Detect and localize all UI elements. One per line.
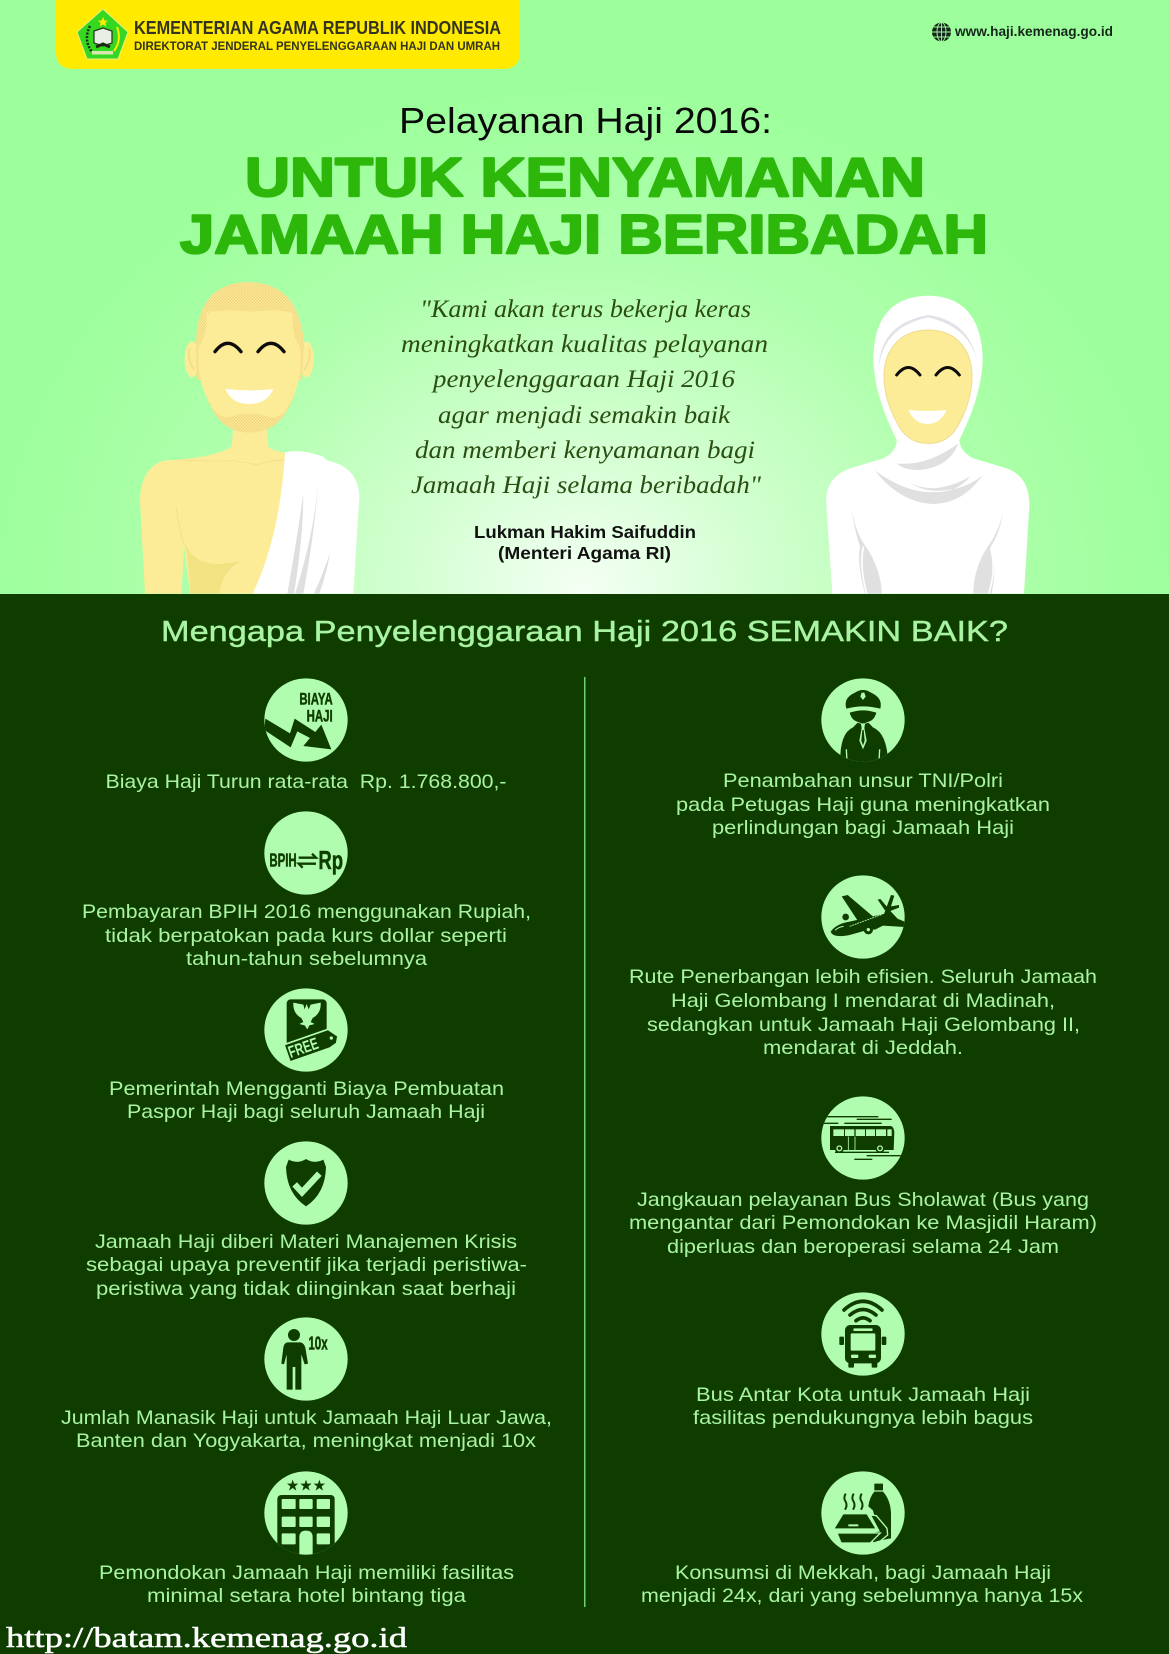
icon: sholawat bus xyxy=(821,1096,905,1180)
quote: dan memberi kenyamanan bagi xyxy=(415,437,755,464)
text: manasik: Banten dan Yogyakarta, meningkat menjadi 10x xyxy=(76,1430,536,1452)
text: paspor xyxy=(109,1078,504,1123)
text: directorate name: DIREKTORAT JENDERAL PENYELENGGARAAN HAJI DAN UMRAH xyxy=(134,41,500,53)
text: biaya haji: Biaya Haji Turun rata-rata Rp. 1.768.800,- xyxy=(106,771,506,793)
quote attribution: (Menteri Agama RI) xyxy=(498,543,671,563)
text: pemondokan: Pemondokan Jamaah Haji memiliki fasilitas xyxy=(99,1562,514,1584)
website link xyxy=(932,22,1113,42)
text: bus antar kota: fasilitas pendukungnya lebih bagus xyxy=(693,1407,1033,1429)
text: website: www.haji.kemenag.go.id xyxy=(954,24,1113,39)
title: subtitle line: Pelayanan Haji 2016: xyxy=(399,100,772,141)
text: TNI/Polri: Penambahan unsur TNI/Polri xyxy=(723,770,1003,792)
quote xyxy=(401,296,768,499)
quote: meningkatkan kualitas pelayanan xyxy=(401,331,768,358)
hair xyxy=(196,282,304,380)
text: pemondokan xyxy=(99,1562,514,1607)
icon: shield check xyxy=(264,1141,348,1225)
text: paspor: Pemerintah Mengganti Biaya Pembuatan xyxy=(109,1078,504,1100)
icon: wifi bus xyxy=(821,1292,905,1376)
icon: police officer xyxy=(821,678,905,762)
text: manajemen krisis xyxy=(86,1231,527,1300)
eyes xyxy=(215,343,284,352)
icon: BPIH to Rupiah: BPIH xyxy=(269,849,297,870)
beard xyxy=(204,390,296,433)
quote: agar menjadi semakin baik xyxy=(438,402,731,429)
text: rute penerbangan: Haji Gelombang I mendarat di Madinah, xyxy=(671,990,1055,1012)
icon: biaya haji falling arrow: HAJI xyxy=(307,706,333,725)
background: dark green lower panel xyxy=(0,594,1169,1654)
icon: biaya haji falling arrow: BIAYA xyxy=(299,690,333,709)
text: TNI/Polri: perlindungan bagi Jamaah Haji xyxy=(712,817,1014,839)
text: BPIH: tidak berpatokan pada kurs dollar seperti xyxy=(105,925,507,947)
quote attribution: Lukman Hakim Saifuddin xyxy=(474,522,696,542)
icon: BPIH to Rupiah xyxy=(264,811,348,895)
quote: penyelenggaraan Haji 2016 xyxy=(431,366,736,393)
body xyxy=(140,427,287,594)
face xyxy=(198,310,301,433)
white cloth xyxy=(253,451,359,594)
text: bus sholawat: diperluas dan beroperasi selama 24 Jam xyxy=(667,1236,1059,1258)
text: BPIH: Pembayaran BPIH 2016 menggunakan Rupiah, xyxy=(82,901,531,923)
text: bus sholawat xyxy=(629,1189,1097,1258)
smile xyxy=(225,389,273,404)
text: bus antar kota: Bus Antar Kota untuk Jamaah Haji xyxy=(696,1384,1030,1406)
text: manasik: Jumlah Manasik Haji untuk Jamaah Haji Luar Jawa, xyxy=(61,1407,552,1429)
text: bus sholawat: mengantar dari Pemondokan ke Masjidil Haram) xyxy=(629,1212,1097,1234)
quote attribution xyxy=(474,522,696,563)
text: konsumsi: Konsumsi di Mekkah, bagi Jamaah Haji xyxy=(675,1562,1051,1584)
header badge xyxy=(56,0,520,69)
background: light green radial xyxy=(0,0,1169,594)
folds xyxy=(875,443,983,504)
text: TNI/Polri: pada Petugas Haji guna meningkatkan xyxy=(676,794,1050,816)
icon: passport free: FREE xyxy=(286,1034,321,1062)
icon: airplane xyxy=(821,875,905,959)
ears xyxy=(185,341,199,377)
text: rute penerbangan: Rute Penerbangan lebih efisien. Seluruh Jamaah xyxy=(629,966,1097,988)
icon: ministry logo xyxy=(77,9,128,59)
eyes xyxy=(897,367,959,375)
text: konsumsi xyxy=(641,1562,1083,1607)
icon: person 10x: 10x xyxy=(308,1333,328,1354)
text: bus sholawat: Jangkauan pelayanan Bus Sholawat (Bus yang xyxy=(637,1189,1089,1211)
text: paspor: Paspor Haji bagi seluruh Jamaah Haji xyxy=(127,1101,485,1123)
icon: biaya haji falling arrow xyxy=(264,678,348,762)
text: konsumsi: menjadi 24x, dari yang sebelumnya hanya 15x xyxy=(641,1585,1083,1607)
text: manasik xyxy=(61,1407,552,1452)
icon: passport free xyxy=(264,988,348,1072)
title: main heading: JAMAAH HAJI BERIBADAH xyxy=(180,203,988,265)
icon: BPIH to Rupiah: Rp xyxy=(318,845,343,875)
quote: Jamaah Haji selama beribadah" xyxy=(411,472,762,499)
text: pemondokan: minimal setara hotel bintang tiga xyxy=(147,1585,466,1607)
icon: hotel three stars xyxy=(264,1471,348,1562)
text: TNI/Polri xyxy=(676,770,1050,839)
icon: food box and bottle xyxy=(821,1471,905,1555)
section heading: Mengapa Penyelenggaraan Haji 2016 SEMAKIN BAIK? xyxy=(161,616,1008,648)
text: bus antar kota xyxy=(693,1384,1033,1429)
text: manajemen krisis: Jamaah Haji diberi Materi Manajemen Krisis xyxy=(95,1231,517,1253)
face xyxy=(884,330,972,443)
smile xyxy=(908,410,947,424)
quote: "Kami akan terus bekerja keras xyxy=(420,296,751,323)
text: rute penerbangan xyxy=(629,966,1097,1059)
robe and hijab xyxy=(826,296,1029,594)
text: manajemen krisis: peristiwa yang tidak diinginkan saat berhaji xyxy=(96,1278,516,1300)
title: main heading: UNTUK KENYAMANAN xyxy=(245,146,925,208)
character: woman in hijab xyxy=(826,296,1029,594)
text: rute penerbangan: mendarat di Jeddah. xyxy=(763,1037,963,1059)
text: ministry name: KEMENTERIAN AGAMA REPUBLIK INDONESIA xyxy=(134,18,501,38)
character: man in ihram xyxy=(140,282,359,594)
icon: person 10x xyxy=(264,1317,348,1401)
text: manajemen krisis: sebagai upaya preventif jika terjadi peristiwa- xyxy=(86,1254,527,1276)
footer url: http://batam.kemenag.go.id xyxy=(6,1622,408,1654)
text: rute penerbangan: sedangkan untuk Jamaah Haji Gelombang II, xyxy=(647,1014,1080,1036)
icon: globe xyxy=(932,22,951,42)
text: BPIH: tahun-tahun sebelumnya xyxy=(186,948,427,970)
title: main heading xyxy=(180,146,988,265)
text: BPIH xyxy=(82,901,531,970)
